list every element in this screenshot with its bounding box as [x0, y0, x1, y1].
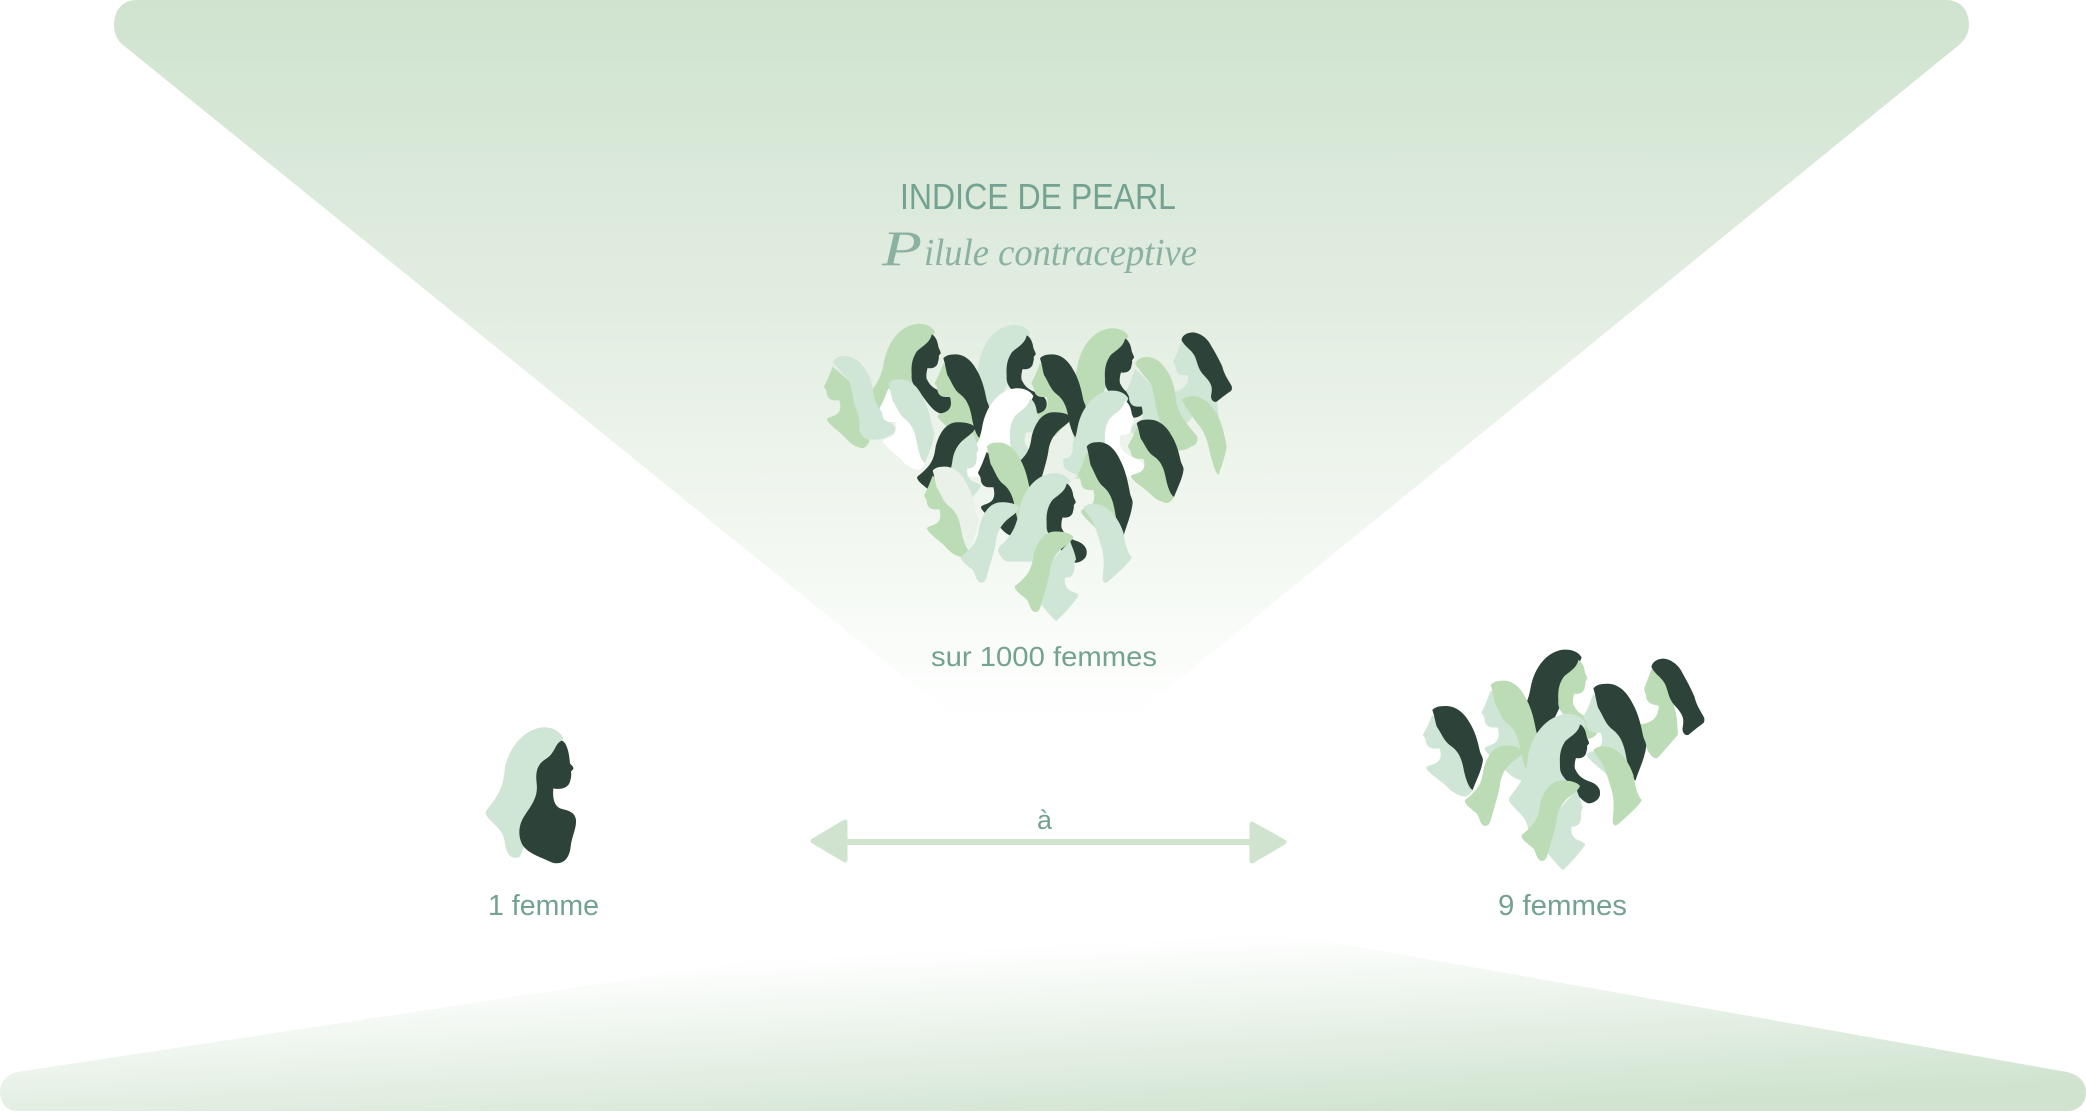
top funnel panel [114, 0, 1969, 790]
caption: sur 1000 femmes: sur 1000 femmes [931, 641, 1157, 672]
subtitle: script: P [881, 220, 922, 276]
icon: nine women [1423, 650, 1704, 870]
subtitle: script: ilule contraceptive [924, 232, 1197, 274]
double arrow [813, 822, 1284, 861]
label: à: à [1037, 805, 1053, 835]
heart of women icon [824, 324, 1232, 621]
title: INDICE DE PEARL [900, 176, 1176, 217]
caption: 9 femmes: 9 femmes [1498, 890, 1627, 922]
caption: 1 femme: 1 femme [488, 890, 599, 922]
bottom funnel panel [0, 905, 2086, 1111]
icon: one woman [486, 727, 576, 863]
subtitle: script [881, 220, 1197, 276]
